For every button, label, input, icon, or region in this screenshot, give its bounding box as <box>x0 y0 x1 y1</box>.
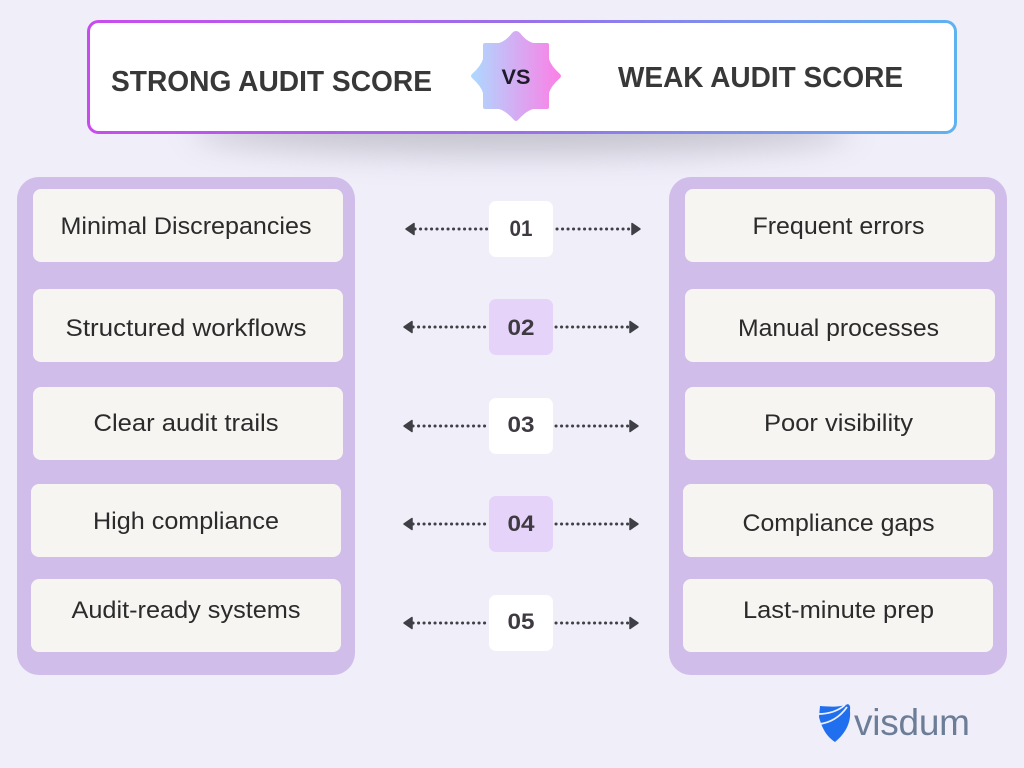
card: high compliance <box>31 484 341 557</box>
card: frequent errors <box>685 189 995 262</box>
row 03 connector <box>404 398 638 454</box>
badge 05: 05 <box>508 609 534 634</box>
card: compliance gaps <box>683 484 993 557</box>
card: minimal discrepancies: Minimal Discrepancies <box>60 213 312 240</box>
wordmark: visdum <box>854 702 970 743</box>
heading: strong audit score: STRONG AUDIT SCORE <box>111 66 432 98</box>
card: clear audit trails: Clear audit trails <box>94 410 278 437</box>
card: audit-ready systems: Audit-ready systems <box>72 597 300 624</box>
vs badge <box>471 31 561 121</box>
header banner <box>88 22 956 132</box>
card: clear audit trails <box>33 387 343 460</box>
badge 04: 04 <box>508 511 535 536</box>
icon: shield <box>818 704 850 742</box>
card: high compliance: High compliance <box>93 508 279 535</box>
card: last-minute prep <box>683 579 993 652</box>
vs badge: VS <box>502 66 530 89</box>
badge 04 <box>489 496 553 552</box>
card: last-minute prep: Last-minute prep <box>743 597 934 624</box>
badge 03: 03 <box>508 412 534 437</box>
row 01 connector <box>406 201 640 257</box>
badge 02: 02 <box>508 315 534 340</box>
card: compliance gaps: Compliance gaps <box>742 510 934 537</box>
card: poor visibility <box>685 387 995 460</box>
panel: weak audit score <box>669 177 1007 675</box>
row 05 connector <box>404 595 638 651</box>
card: poor visibility: Poor visibility <box>764 410 913 437</box>
card: frequent errors: Frequent errors <box>752 213 924 240</box>
card: manual processes <box>685 289 995 362</box>
row 02 connector <box>404 299 638 355</box>
card: structured workflows: Structured workflows <box>66 315 306 342</box>
card: audit-ready systems <box>31 579 341 652</box>
badge 03 <box>489 398 553 454</box>
card: manual processes: Manual processes <box>738 315 939 342</box>
badge 01 <box>489 201 553 257</box>
panel: strong audit score <box>17 177 355 675</box>
card: structured workflows <box>33 289 343 362</box>
badge 05 <box>489 595 553 651</box>
heading: weak audit score: WEAK AUDIT SCORE <box>618 62 903 94</box>
card: minimal discrepancies <box>33 189 343 262</box>
logo: visdum <box>818 702 970 743</box>
badge 02 <box>489 299 553 355</box>
header shadow <box>192 106 852 154</box>
badge 01: 01 <box>510 216 532 241</box>
row 04 connector <box>404 496 638 552</box>
